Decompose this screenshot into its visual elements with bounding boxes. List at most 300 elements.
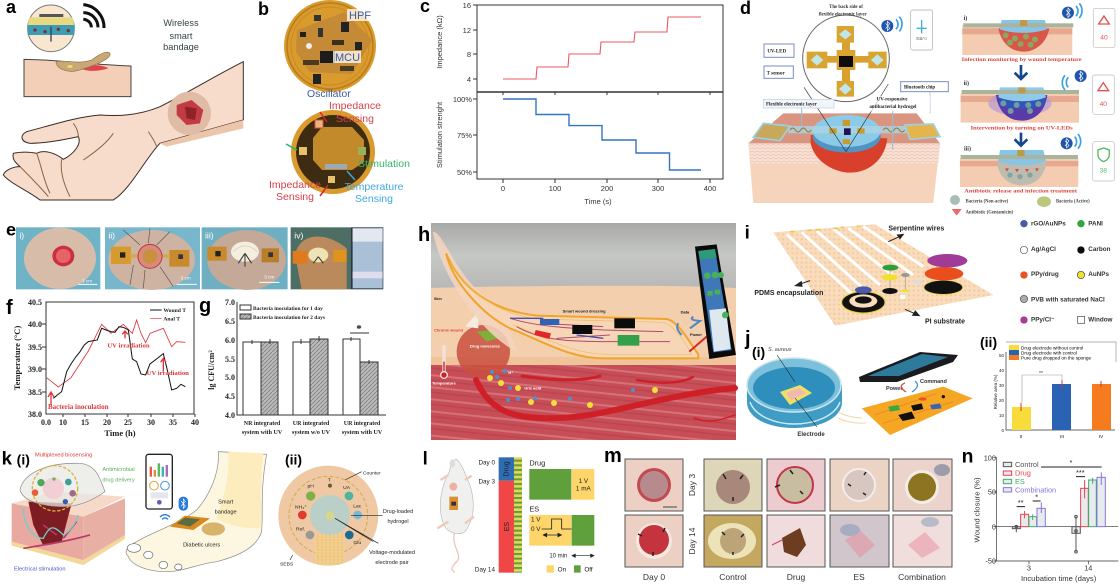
label iii): iii) bbox=[964, 146, 971, 153]
arrows i bbox=[795, 234, 919, 316]
tick labels: 4.0 bbox=[225, 411, 235, 420]
label: impedance sensing bottom: Impedance bbox=[269, 179, 321, 191]
significance marks bbox=[1017, 467, 1102, 507]
flexible electronics strips and chips bbox=[753, 120, 940, 144]
label f: f bbox=[6, 297, 13, 319]
icon: bluetooth bbox=[179, 497, 188, 511]
label: impedance sensing bottom bbox=[269, 179, 321, 203]
bars bbox=[1012, 477, 1105, 533]
legend n bbox=[1003, 460, 1056, 494]
text foot: bandage bbox=[215, 510, 237, 516]
annotations (ii): Counter bbox=[363, 470, 381, 476]
axis labels: 12 bbox=[463, 26, 471, 35]
photo: circuit top side bbox=[284, 0, 376, 92]
axis labels bbox=[435, 1, 716, 206]
axes bbox=[42, 302, 195, 417]
panel m: wound photographs bbox=[604, 445, 952, 582]
legend: bacteria and antibiotic: Antibiotic (Gentamicin) bbox=[966, 211, 1014, 216]
photo i: wound: i) bbox=[19, 230, 24, 240]
wound bbox=[28, 502, 72, 546]
error bars bbox=[1021, 380, 1101, 411]
axis labels: Time (s) bbox=[584, 197, 612, 206]
axis labels: 8 bbox=[467, 50, 471, 59]
axis labels: 200 bbox=[601, 184, 613, 193]
label n: n bbox=[962, 446, 973, 467]
label: stimulation: Stimulation bbox=[358, 158, 410, 170]
column and row labels: Combination bbox=[898, 572, 946, 582]
axis tick labels bbox=[28, 298, 199, 427]
sensor patch: Ref. bbox=[296, 526, 305, 532]
label e: e bbox=[6, 220, 16, 240]
axis labels: 50% bbox=[457, 168, 472, 177]
stacked layers small bbox=[882, 265, 922, 299]
axis titles: Incubation time (days) bbox=[1021, 574, 1097, 583]
icon: bluetooth ii bbox=[1062, 70, 1087, 90]
orange board bbox=[862, 387, 973, 435]
callout: flexible electronic layer: Flexible electronic layer bbox=[766, 103, 818, 108]
legend n: Drug bbox=[1015, 469, 1031, 478]
label electrode: Electrode bbox=[797, 432, 825, 438]
annotations drug-loaded: Drug-loaded bbox=[383, 509, 413, 515]
legend: Pure drug dropped on the sponge bbox=[1021, 356, 1091, 360]
axes bbox=[237, 302, 386, 415]
panel n: wound closure chart bbox=[962, 446, 1118, 583]
drug protocol: 1 V bbox=[579, 478, 589, 485]
legend: Drug electrode without control bbox=[1021, 346, 1083, 350]
chart (ii): relative area: IV bbox=[1099, 434, 1103, 439]
photo i: wound: 3 cm bbox=[82, 278, 92, 283]
axis tick labels: 38.0 bbox=[28, 410, 42, 419]
annotations drug-loaded: electrode pair bbox=[375, 560, 409, 566]
wound bed bbox=[811, 135, 887, 173]
axis labels: 300 bbox=[652, 184, 664, 193]
label: HPF: HPF bbox=[349, 10, 371, 22]
label m: m bbox=[604, 445, 622, 467]
caption iii: Antibiotic release and infection treatment bbox=[964, 188, 1077, 194]
phone iii ok bbox=[1093, 142, 1114, 181]
photo: drug day 14 bbox=[767, 515, 825, 567]
h labels: Chronic wound bbox=[434, 328, 464, 333]
foot bbox=[126, 452, 267, 572]
phone bbox=[695, 244, 736, 359]
panel l: stimulation protocol bbox=[423, 447, 594, 574]
title: back side bbox=[819, 5, 867, 17]
h labels: Uric acid bbox=[524, 385, 542, 390]
label antimicrobial drug delivery: drug delivery bbox=[102, 478, 135, 484]
materials legend: PVB with saturated NaCl bbox=[1031, 296, 1105, 303]
axis titles bbox=[972, 477, 1097, 583]
phone app bbox=[146, 454, 172, 509]
chart (ii): relative area: II bbox=[1020, 434, 1022, 439]
label ii): ii) bbox=[964, 80, 969, 87]
axis tick labels: 40 bbox=[191, 418, 199, 427]
phone j bbox=[859, 352, 958, 382]
chart lines bbox=[47, 308, 189, 398]
error bars bbox=[1015, 472, 1101, 553]
arrow i to ii bbox=[1015, 65, 1027, 79]
h labels: Smart wound dressing bbox=[563, 309, 606, 314]
ticks bbox=[993, 353, 1004, 433]
h labels bbox=[432, 297, 702, 390]
magnifier cone bbox=[804, 84, 888, 152]
column and row labels: Control bbox=[719, 572, 747, 582]
axis tick labels: 30 bbox=[147, 418, 155, 427]
photo iii: hydrogel flower bbox=[202, 227, 288, 290]
panel g: bacteria bars bbox=[199, 295, 386, 436]
icon: wireless waves bbox=[83, 5, 104, 28]
ES protocol bbox=[529, 505, 594, 546]
panel d: UV-responsive flexible dressing bbox=[740, 0, 1115, 216]
ring electrode bbox=[842, 286, 885, 313]
materials legend: PPy/drug bbox=[1031, 271, 1059, 278]
group labels: UR integrated bbox=[344, 421, 381, 427]
label j: j bbox=[744, 328, 751, 350]
photo ii: device on wound bbox=[105, 227, 200, 290]
sensor patch: NH₄⁺ bbox=[295, 504, 307, 510]
sensor patch: T bbox=[328, 478, 331, 484]
chart (ii): relative area: III bbox=[1060, 434, 1064, 439]
sensor patch bbox=[278, 466, 378, 566]
title: back side: The back side of bbox=[829, 5, 863, 10]
bars bbox=[1012, 407, 1031, 430]
y title: lg CFU/cm² bbox=[207, 350, 216, 390]
ticks: 30 bbox=[999, 383, 1004, 388]
callout: UV-responsive hydrogel: UV-responsive bbox=[877, 98, 908, 103]
icon: wound cross-section bbox=[457, 312, 510, 378]
label i: i bbox=[745, 221, 750, 242]
label S. aureus: S. aureus bbox=[768, 347, 792, 353]
label: impedance sensing bottom: Sensing bbox=[276, 191, 314, 203]
axis labels: 16 bbox=[463, 1, 471, 10]
annotations (ii) bbox=[280, 470, 381, 567]
illustration: hand with wound bbox=[3, 5, 243, 200]
timeline labels: Day 14 bbox=[475, 567, 495, 574]
tick labels: 7.0 bbox=[225, 298, 235, 307]
scale 10 min: 10 min bbox=[549, 554, 567, 560]
significance star: * bbox=[356, 323, 362, 335]
phone ii alert bbox=[1093, 75, 1114, 114]
photo: ES day 14 bbox=[830, 515, 889, 567]
tick labels: 4.5 bbox=[225, 392, 235, 401]
axis labels: 0 bbox=[501, 184, 505, 193]
label power: Power bbox=[886, 386, 903, 392]
h labels: Drug molecules bbox=[470, 343, 501, 348]
label: Oscillator: Oscillator bbox=[307, 88, 351, 100]
photo: drug day 3 bbox=[767, 459, 825, 511]
legend bbox=[1009, 345, 1091, 360]
callouts UV irradiation: UV irradiation bbox=[107, 343, 150, 350]
legend on/off: On bbox=[558, 566, 567, 573]
annotations drug-loaded: Voltage-modulated bbox=[369, 550, 415, 556]
legend n: Combination bbox=[1015, 485, 1056, 494]
callout: Bluetooth chip: Bluetooth chip bbox=[904, 86, 935, 91]
h labels: Power bbox=[690, 332, 702, 337]
legend: bacteria and antibiotic: Bacteria (Non-active) bbox=[966, 200, 1009, 205]
substrate sheet bbox=[773, 224, 993, 326]
axis titles bbox=[12, 326, 136, 438]
bandage film bbox=[20, 463, 105, 511]
group labels: system with UV bbox=[242, 430, 283, 436]
axis labels: Stimulation strenght bbox=[435, 101, 444, 168]
molecules bbox=[487, 369, 658, 408]
legend g: Bacteria inoculation for 2 days bbox=[253, 315, 325, 321]
arrows (ii) bbox=[290, 472, 383, 560]
label (ii): (ii) bbox=[980, 334, 997, 350]
h labels: Skin bbox=[434, 297, 442, 301]
callout: flexible electronic layer bbox=[763, 99, 834, 108]
panel f: temperature plot bbox=[6, 297, 199, 438]
label multiplexed biosensing: Multiplexed biosensing bbox=[35, 452, 92, 458]
axis tick labels: 25 bbox=[124, 418, 132, 427]
phone iii ok: 38 bbox=[1100, 168, 1107, 175]
panel c: impedance and stimulation plots bbox=[420, 0, 723, 206]
callout: UV-responsive hydrogel: antibacterial hydrogel bbox=[869, 105, 917, 110]
label (ii): (ii) bbox=[285, 451, 302, 467]
sensor patch: Lac bbox=[353, 503, 362, 509]
tick labels: 50 bbox=[988, 488, 996, 497]
label i): i) bbox=[964, 15, 967, 22]
axis tick labels: 39.5 bbox=[28, 343, 42, 352]
materials legend bbox=[1020, 220, 1113, 324]
photo: circuit bottom side bbox=[286, 110, 375, 196]
callout: Bluetooth chip bbox=[901, 82, 948, 113]
photo: combination day 14 bbox=[893, 515, 952, 567]
arrow ii to iii bbox=[1015, 133, 1027, 146]
photo ii: device on wound: ii) bbox=[108, 230, 115, 240]
blood vessels bbox=[476, 376, 735, 421]
phone i alert bbox=[1093, 8, 1115, 48]
icon: phone: 体温(℃) bbox=[916, 35, 927, 40]
tick labels: 5.5 bbox=[225, 355, 235, 364]
tick labels: 3 bbox=[1027, 563, 1031, 572]
panel k: diabetic ulcer bandage bbox=[2, 447, 383, 572]
label: MCU: MCU bbox=[335, 52, 360, 64]
arcs between phone and board bbox=[901, 383, 906, 392]
chart: stimulation steps bbox=[503, 99, 701, 170]
stacked layers big bbox=[924, 254, 967, 294]
label: impedance sensing top: Sensing bbox=[336, 113, 374, 125]
photo iii: hydrogel flower: 3 cm bbox=[264, 274, 275, 279]
ticks: Relative area (%) bbox=[993, 374, 998, 409]
text: wireless smart bandage: Wireless bbox=[163, 18, 199, 28]
axis tick labels: 39.0 bbox=[28, 365, 42, 374]
photo iv: UV and phone bbox=[291, 227, 383, 289]
axis tick labels: 15 bbox=[81, 418, 89, 427]
photo: combination day 3 bbox=[893, 459, 952, 511]
panel n: wound closure chart: * bbox=[1035, 492, 1038, 501]
label: temperature sensing: Sensing bbox=[355, 193, 393, 205]
callout bacteria inoculation bbox=[48, 392, 109, 411]
column and row labels bbox=[643, 474, 946, 582]
legend n: Control bbox=[1015, 460, 1039, 469]
strip iii: antibiotic release bbox=[960, 150, 1078, 187]
tick labels: 0 bbox=[992, 522, 996, 531]
label: serpentine wires: Serpentine wires bbox=[888, 226, 944, 233]
label electrical stimulation: Electrical stimulation bbox=[14, 566, 66, 572]
scale 10 min bbox=[549, 554, 594, 560]
legend g: Bacteria inoculation for 1 day bbox=[253, 306, 323, 312]
callout bacteria inoculation: Bacteria inoculation bbox=[48, 403, 109, 411]
dressing outline bbox=[433, 232, 698, 358]
axis tick labels: 35 bbox=[169, 418, 177, 427]
timeline bars: Drug bbox=[504, 461, 511, 477]
text: wireless smart bandage bbox=[163, 18, 199, 52]
photo: control day 14 bbox=[704, 515, 762, 567]
callout: UV-LED bbox=[764, 44, 794, 57]
annotations drug-loaded: hydrogel bbox=[387, 519, 409, 525]
ES protocol: 1 V bbox=[531, 517, 541, 524]
column and row labels: ES bbox=[853, 572, 865, 582]
axis titles: Wound closure (%) bbox=[972, 477, 981, 542]
ticks: 40 bbox=[999, 368, 1004, 373]
axis tick labels: 0.0 bbox=[41, 418, 51, 427]
panel i: layered electrode bbox=[745, 220, 1113, 326]
drug protocol: 1 mA bbox=[576, 485, 591, 492]
axis labels: 400 bbox=[704, 184, 716, 193]
axis titles: Time (h) bbox=[104, 428, 136, 438]
panel n: wound closure chart: *** bbox=[1076, 468, 1085, 477]
legend f: Anal T bbox=[163, 316, 180, 322]
materials legend: AuNPs bbox=[1088, 271, 1110, 278]
label command: Command bbox=[920, 379, 947, 385]
drug protocol bbox=[529, 459, 594, 500]
timeline bars: ES bbox=[504, 522, 511, 531]
chart (ii): relative area: ** bbox=[1039, 371, 1043, 377]
strip ii: UV intervention bbox=[961, 87, 1079, 123]
label: PDMS encapsulation: PDMS encapsulation bbox=[754, 290, 823, 297]
label (i): (i) bbox=[752, 344, 765, 360]
column and row labels: Drug bbox=[787, 572, 805, 582]
materials legend: PPy/Cl⁻ bbox=[1031, 317, 1054, 324]
callout: T sensor bbox=[764, 66, 793, 78]
wire dish to board bbox=[838, 412, 866, 423]
panel j: petri dish and drug release bbox=[744, 328, 1116, 439]
panel a: wireless smart bandage bbox=[3, 0, 243, 200]
label k: k bbox=[2, 447, 13, 468]
sensor patch: UA bbox=[343, 485, 351, 491]
label (i): (i) bbox=[17, 451, 30, 467]
hydrogel disc bbox=[813, 115, 881, 153]
tick labels: 5.0 bbox=[225, 373, 235, 382]
axes bbox=[993, 458, 1118, 564]
photo i: wound bbox=[16, 227, 100, 289]
callouts UV irradiation bbox=[107, 331, 189, 377]
strip i: infection monitoring bbox=[962, 20, 1073, 55]
label antimicrobial drug delivery: Antimicrobial bbox=[102, 467, 135, 473]
annotations drug-loaded bbox=[369, 509, 415, 566]
callouts UV irradiation: UV irradiation bbox=[147, 370, 189, 377]
legend n: ES bbox=[1015, 477, 1025, 486]
timeline labels: Day 3 bbox=[478, 478, 495, 485]
legend on/off bbox=[547, 565, 593, 573]
serpentine wires bbox=[787, 226, 923, 295]
axis tick labels: 10 bbox=[59, 418, 67, 427]
h labels: Temperature bbox=[432, 380, 457, 385]
photo: day 0 day 3 row bbox=[625, 459, 683, 511]
icon: phone bbox=[911, 10, 933, 50]
legend: Drug electrode with control bbox=[1021, 350, 1077, 356]
thermometer bbox=[441, 345, 447, 378]
tick labels bbox=[984, 453, 1092, 572]
petri dish bbox=[747, 355, 842, 428]
bars bbox=[243, 333, 378, 415]
group labels: system with UV bbox=[342, 430, 383, 436]
label h: h bbox=[418, 224, 430, 246]
materials legend: Ag/AgCl bbox=[1031, 246, 1056, 253]
column and row labels: Day 0 bbox=[643, 572, 665, 582]
photo: ES day 3 bbox=[830, 459, 889, 511]
blood vessels and wires bbox=[23, 522, 90, 548]
axis labels: Impedance (kΩ) bbox=[435, 15, 444, 69]
tick labels bbox=[225, 298, 235, 420]
panel b: circuit photos bbox=[258, 0, 410, 205]
label: impedance sensing top bbox=[329, 100, 381, 125]
axis tick labels: 20 bbox=[103, 418, 111, 427]
tick labels: 6.0 bbox=[225, 336, 235, 345]
ticks: 10 bbox=[999, 413, 1004, 418]
column and row labels: Day 3 bbox=[687, 474, 697, 496]
chart (ii): relative area bbox=[980, 334, 1116, 439]
tick labels: 6.5 bbox=[225, 317, 235, 326]
chips bbox=[534, 318, 639, 346]
label: temperature sensing: Temperature bbox=[345, 181, 404, 193]
panel h: smart wound dressing bbox=[418, 223, 736, 440]
photo: day 0 day 14 row bbox=[625, 515, 683, 567]
legend f: Wound T bbox=[163, 308, 186, 314]
mouse bbox=[437, 459, 474, 572]
materials legend: PANI bbox=[1088, 221, 1103, 228]
significance bracket bbox=[1022, 375, 1062, 403]
label antimicrobial drug delivery bbox=[102, 467, 135, 484]
icon: wifi bbox=[160, 515, 170, 519]
icon: bluetooth iii bbox=[1061, 134, 1081, 149]
axis labels: 100 bbox=[549, 184, 561, 193]
icon: bluetooth i bbox=[1062, 3, 1082, 19]
ticks: 50 bbox=[999, 353, 1004, 358]
magnified electrode cross bbox=[803, 15, 889, 102]
timeline bars bbox=[499, 457, 522, 573]
legend g bbox=[240, 305, 325, 321]
chart: impedance steps bbox=[503, 17, 701, 79]
axis labels: 100% bbox=[453, 95, 472, 104]
tick labels: 14 bbox=[1084, 563, 1092, 572]
sensor patch: pH bbox=[307, 484, 314, 490]
group labels: UR integrated bbox=[293, 421, 330, 427]
label: impedance sensing top: Impedance bbox=[329, 100, 381, 112]
caption i: Infection monitoring by wound temperature bbox=[962, 57, 1082, 63]
icon: wound bbox=[168, 92, 211, 135]
timeline labels bbox=[475, 459, 495, 574]
text foot bbox=[183, 500, 237, 548]
icon: bluetooth bbox=[881, 17, 902, 32]
axis tick labels: 40.5 bbox=[28, 298, 42, 307]
drug protocol: Drug bbox=[529, 459, 545, 468]
label: PI substrate: PI substrate bbox=[925, 318, 965, 325]
materials legend: Window bbox=[1088, 317, 1113, 324]
callout: UV-LED: UV-LED bbox=[767, 50, 786, 55]
phone i alert: 40 bbox=[1100, 34, 1108, 41]
materials legend: rGO/AuNPs bbox=[1031, 221, 1066, 228]
skin block bbox=[748, 113, 940, 203]
axis tick labels: 38.5 bbox=[28, 388, 42, 397]
photo ii: device on wound: 3 cm bbox=[181, 276, 191, 281]
timeline labels: Day 0 bbox=[478, 459, 495, 466]
skin section with bandage bbox=[24, 52, 131, 97]
ES protocol: ES bbox=[529, 505, 539, 514]
text: wireless smart bandage: bandage bbox=[163, 42, 199, 52]
materials legend: Carbon bbox=[1088, 246, 1111, 253]
tick labels: 100 bbox=[984, 453, 996, 462]
